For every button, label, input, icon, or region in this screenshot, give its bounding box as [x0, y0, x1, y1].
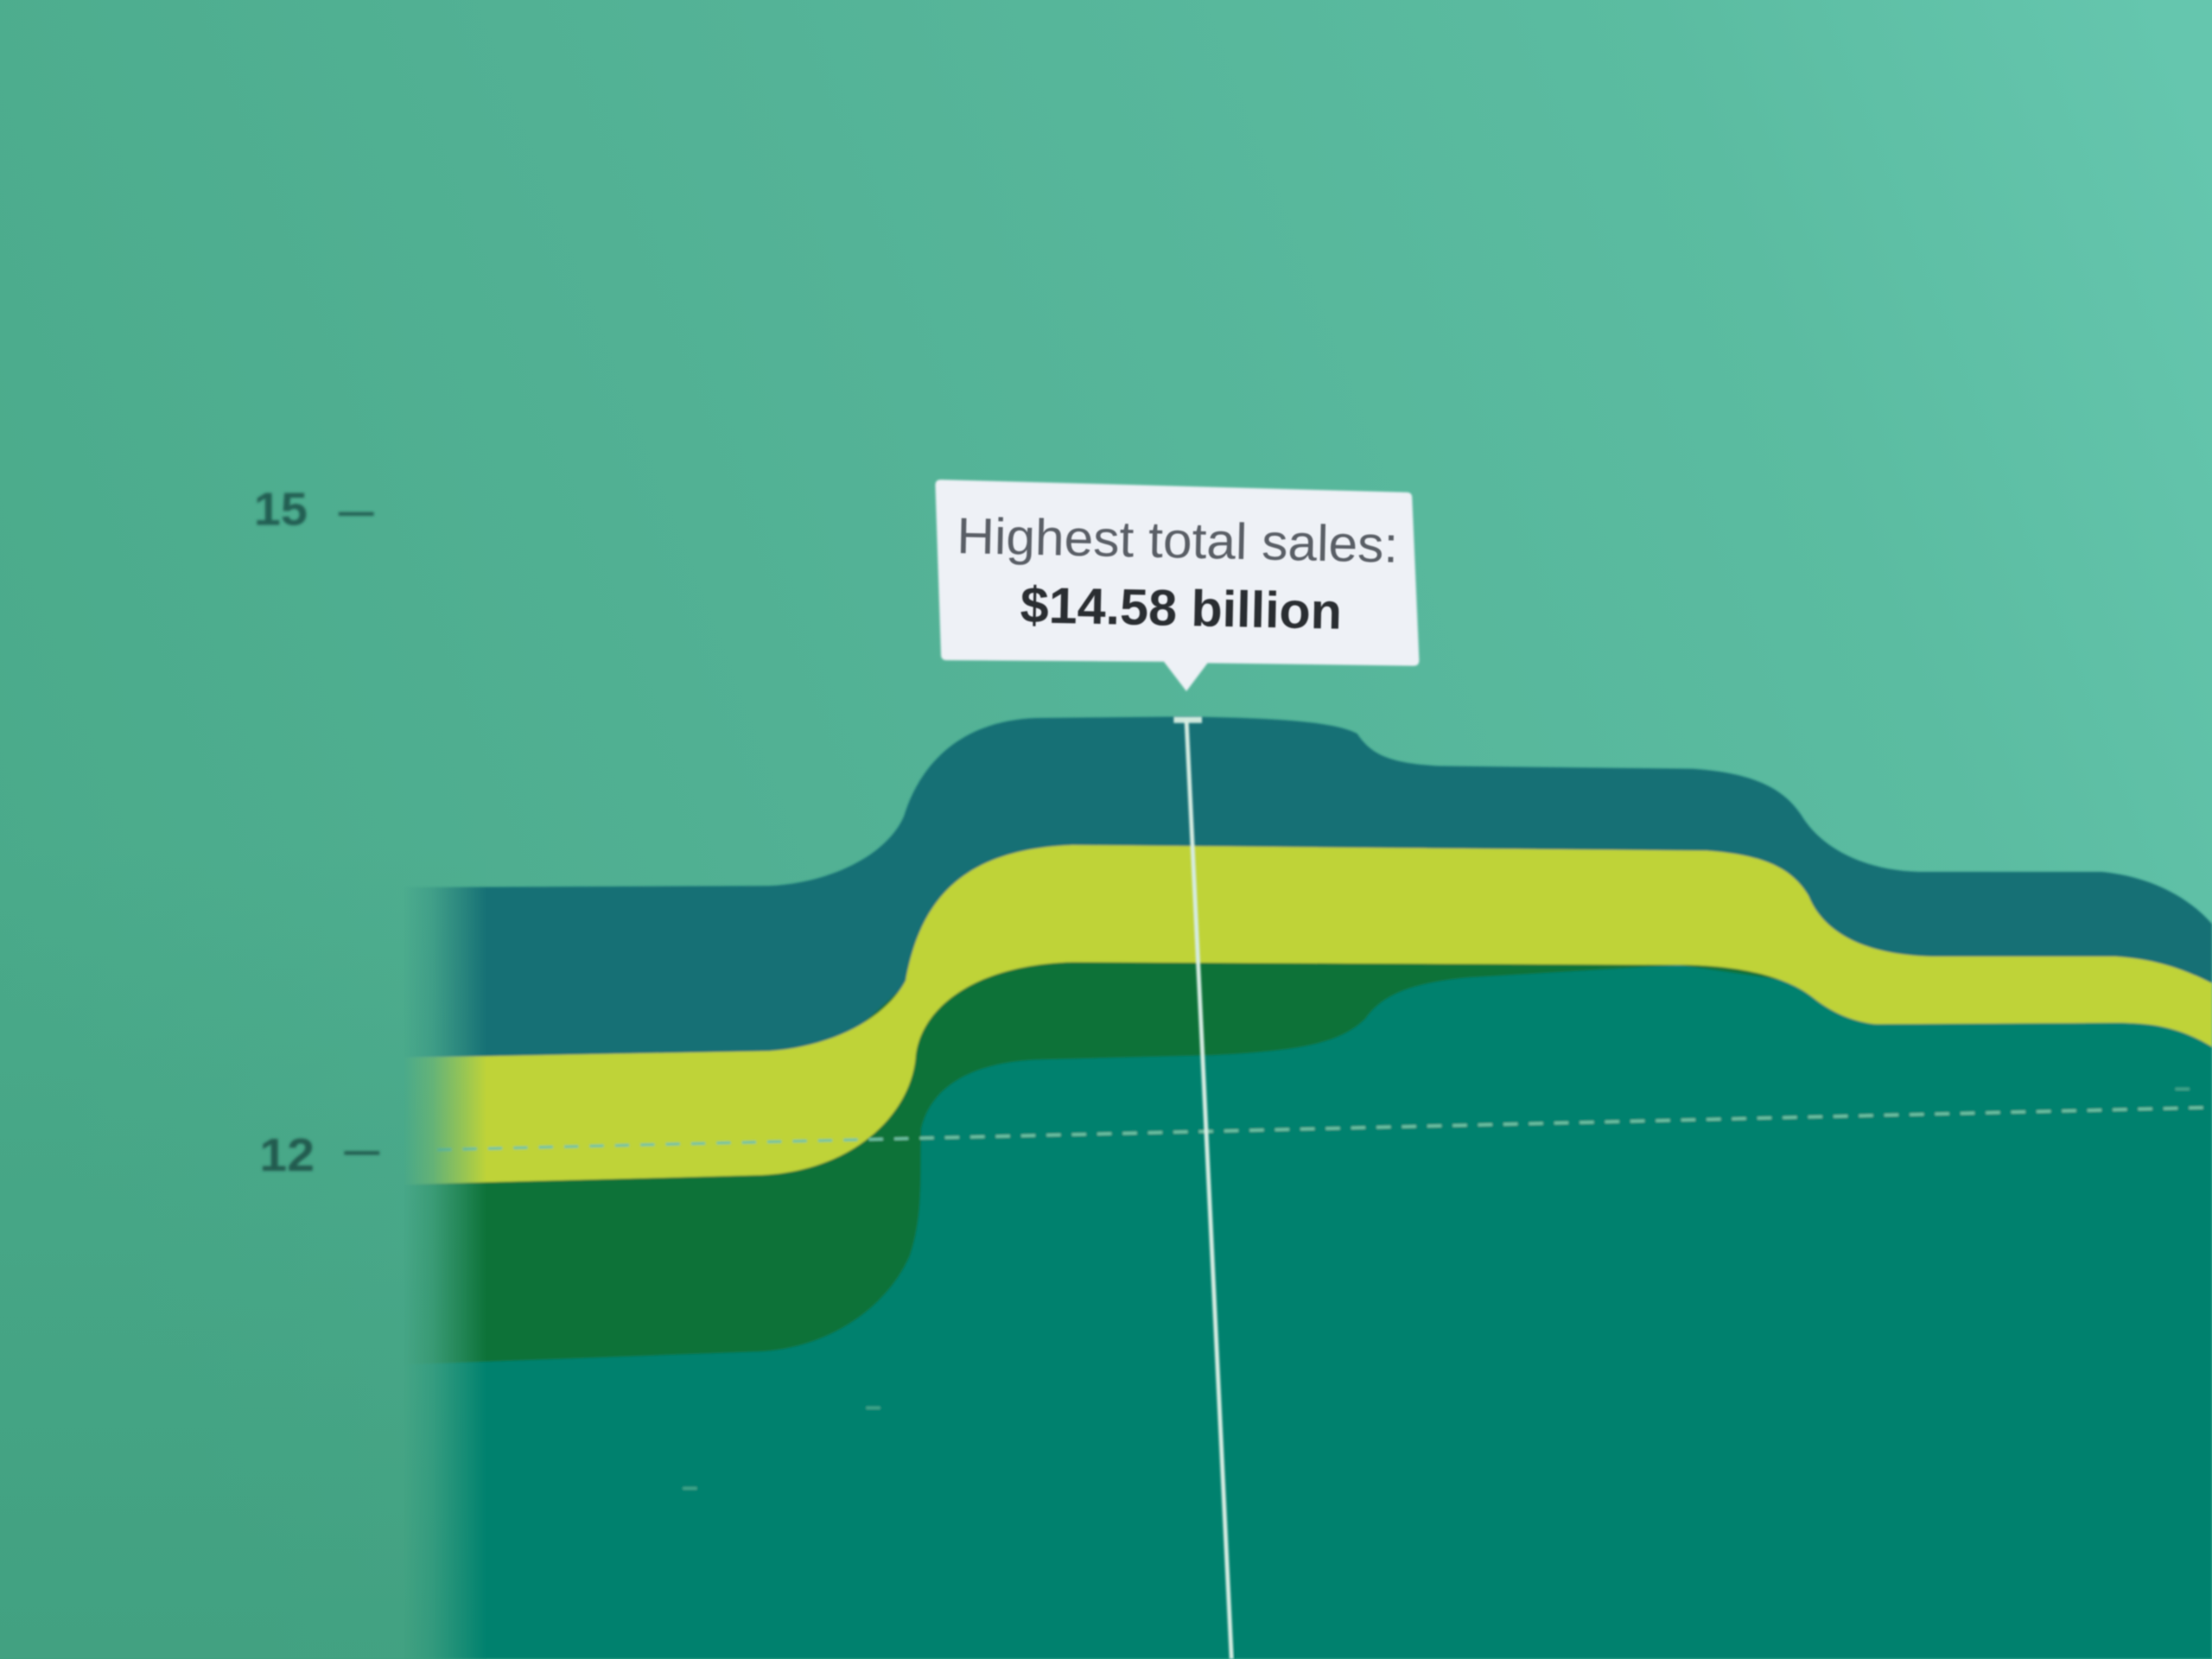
- axis label: 15: [254, 483, 374, 535]
- area: base teal-green: [381, 965, 2212, 1659]
- axis label: 12: 12: [259, 1129, 315, 1181]
- minor tick marks: [683, 1089, 2190, 1488]
- callout label: Highest total sales:: [957, 508, 1399, 574]
- axis label: 12: [259, 1129, 379, 1181]
- peak marker line: [1173, 716, 1231, 1659]
- stacked area chart: [381, 716, 2212, 1659]
- gridline: dashed 12 level: [437, 1108, 2212, 1150]
- callout: highest total sales: [935, 480, 1419, 691]
- area: yellow band: [381, 845, 2212, 1185]
- callout value: $14.58 billion: [1020, 577, 1343, 640]
- area: top teal band: [420, 715, 2212, 1058]
- axis label: 15: 15: [254, 483, 308, 535]
- area: dark green band: [416, 961, 1778, 1363]
